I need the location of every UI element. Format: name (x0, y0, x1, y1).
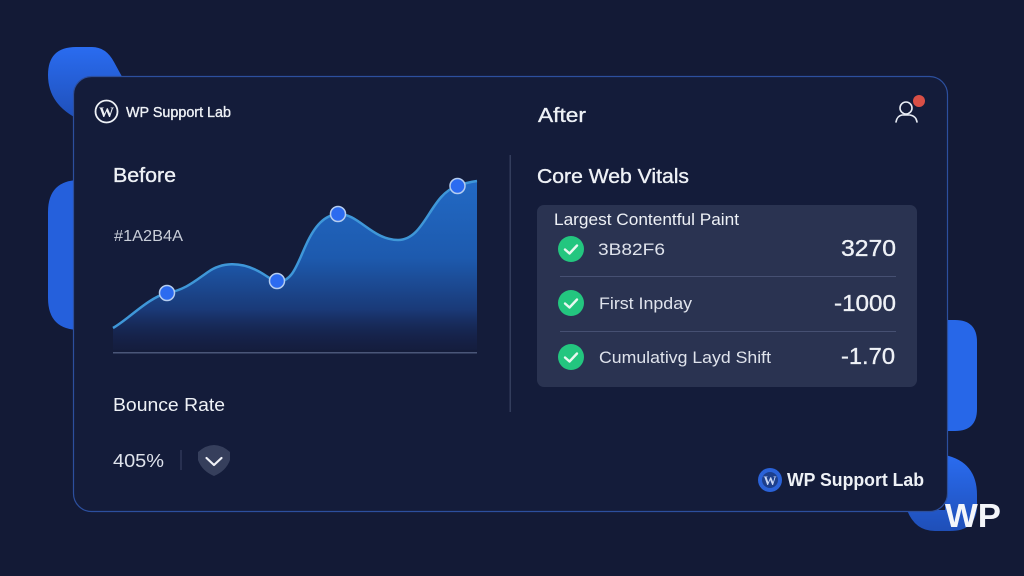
vertical divider between columns (510, 155, 511, 412)
icon: blue circle logo (758, 468, 782, 492)
decorative blue blob: top left (48, 47, 126, 120)
metric row 3 (558, 343, 895, 370)
area chart (113, 178, 477, 354)
metric row 2: -1000 (834, 290, 896, 316)
metric row 1: 3B82F6 (598, 240, 665, 259)
footer logo: WP Support Lab (758, 468, 924, 492)
chart label: #1A2B4A (114, 228, 184, 245)
heading: Before: Before (113, 165, 176, 187)
corner WP mark: WP (945, 497, 1001, 534)
decorative blue blob: left (48, 180, 80, 330)
decorative blue blob: right (940, 320, 977, 431)
icon: user with notification badge (896, 95, 925, 122)
data point 2 (270, 274, 284, 288)
heading: Core Web Vitals: Core Web Vitals (537, 166, 689, 188)
data point 3 (330, 206, 346, 222)
icon: green check (558, 290, 584, 316)
data point 1 (160, 286, 174, 300)
bounce rate label: Bounce Rate (113, 395, 225, 415)
header logo: WP Support Lab (96, 100, 231, 122)
heading: After: After (538, 105, 586, 127)
brand name: WP Support Lab (126, 105, 231, 121)
data point 4 (450, 178, 465, 194)
icon: green check (558, 344, 584, 370)
metric row 1: 3270 (841, 235, 896, 261)
bounce rate value: 405% (113, 450, 164, 471)
metric row 3: -1.70 (841, 343, 895, 369)
metric row 2: First Inpday (599, 294, 693, 313)
metric row 2 (558, 290, 896, 316)
icon: shield with down chevron (198, 445, 230, 476)
icon: blue circle logo: W (764, 473, 776, 488)
main dashboard card (74, 76, 948, 512)
icon: green check (558, 236, 584, 262)
icon: WordPress logo: W (99, 105, 114, 121)
metric row 3: Cumulativg Layd Shift (599, 348, 771, 367)
chart baseline (113, 352, 477, 354)
decorative blue blob: bottom right (907, 455, 977, 531)
metric row 1 (558, 235, 896, 262)
metric title: Largest Contentful Paint (554, 211, 739, 229)
panel: core web vitals metrics (537, 205, 917, 387)
brand name: WP Support Lab (787, 470, 924, 490)
